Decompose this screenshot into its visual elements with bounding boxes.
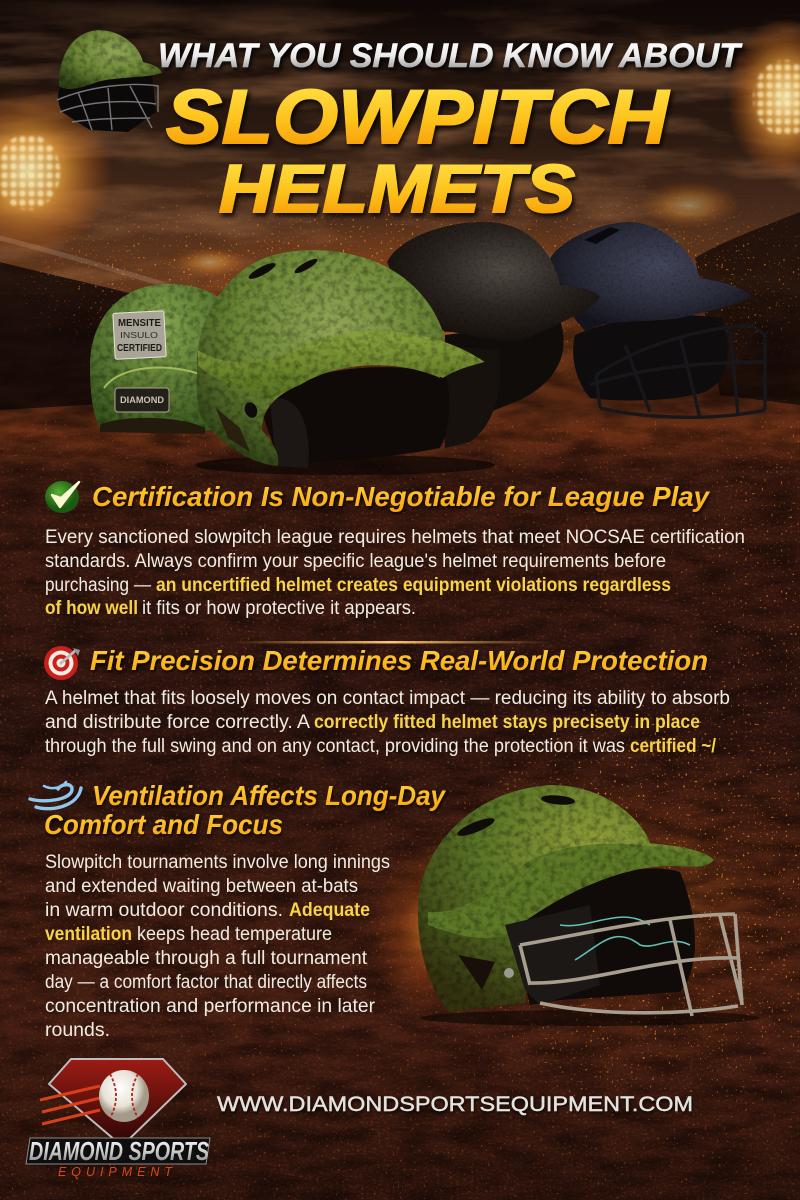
body text: standards. Always confirm your specific league's helmet requirements before bbox=[45, 551, 666, 572]
body text: concentration and performance in later bbox=[45, 996, 376, 1017]
subtitle: EQUIPMENT bbox=[58, 1165, 173, 1179]
body text: Every sanctioned slowpitch league requires helmets that meet NOCSAE certification bbox=[45, 527, 745, 548]
wordmark band bbox=[26, 1138, 210, 1164]
heading line 2: Comfort and Focus bbox=[44, 809, 283, 840]
website url: WWW.DIAMONDSPORTSEQUIPMENT.COM bbox=[217, 1093, 693, 1116]
body text: correctly fitted helmet stays precisety in place bbox=[314, 712, 700, 733]
body text bbox=[45, 852, 390, 1041]
logo: diamond sports equipment bbox=[26, 1059, 210, 1179]
body text: purchasing — bbox=[45, 575, 151, 596]
body text: through the full swing and on any contact, providing the protection it was bbox=[45, 736, 625, 757]
section: fit precision bbox=[44, 645, 730, 757]
body text: A helmet that fits loosely moves on contact impact — reducing its ability to absorb bbox=[45, 688, 730, 709]
body text: Adequate bbox=[289, 900, 370, 921]
body text: it fits or how protective it appears. bbox=[142, 598, 416, 619]
heading line 1: Ventilation Affects Long-Day bbox=[92, 780, 447, 811]
body text: and distribute force correctly. A bbox=[45, 712, 310, 733]
section: ventilation bbox=[30, 780, 447, 1041]
title line: slowpitch: SLOWPITCH bbox=[166, 75, 670, 160]
body text: of how well bbox=[45, 598, 138, 619]
body text: manageable through a full tournament bbox=[45, 948, 368, 969]
heading: Fit Precision Determines Real-World Protection bbox=[90, 645, 708, 676]
helmet: large green batting helmet bbox=[195, 250, 500, 475]
speed streaks bbox=[40, 1086, 100, 1124]
baseball bbox=[99, 1070, 149, 1122]
body text: rounds. bbox=[45, 1020, 110, 1041]
body text: ventilation bbox=[45, 924, 132, 945]
title bbox=[158, 37, 743, 227]
certified label: INSULO bbox=[120, 331, 158, 340]
wordmark: DIAMOND SPORTS bbox=[29, 1136, 209, 1166]
diamond emblem bbox=[49, 1059, 186, 1146]
body text bbox=[45, 688, 730, 757]
body text: keeps head temperature bbox=[137, 924, 332, 945]
body text: day — a comfort factor that directly affects bbox=[45, 972, 367, 993]
helmet: navy with cage bbox=[548, 222, 765, 418]
icon: small caged helmet bbox=[57, 30, 162, 132]
helmet: matte black bbox=[387, 222, 600, 420]
icon: target with dart bbox=[44, 646, 80, 680]
lower badge: DIAMOND bbox=[120, 395, 165, 405]
certified label: MENSITE bbox=[118, 318, 161, 329]
body text: an uncertified helmet creates equipment violations regardless bbox=[156, 575, 671, 596]
certified label bbox=[113, 311, 166, 359]
body text bbox=[45, 527, 745, 619]
helmet: green with face cage and airflow bbox=[368, 785, 760, 1026]
heading: Certification Is Non-Negotiable for League Play bbox=[92, 481, 711, 512]
body text: and extended waiting between at-bats bbox=[45, 876, 358, 897]
lower badge bbox=[115, 388, 169, 412]
body text: Slowpitch tournaments involve long innings bbox=[45, 852, 390, 873]
body text: certified ~/ bbox=[630, 736, 717, 757]
certified label: CERTIFIED bbox=[117, 343, 162, 354]
body text: in warm outdoor conditions. bbox=[45, 900, 283, 921]
title line: helmets: HELMETS bbox=[219, 151, 575, 227]
icon: blue wind swirl bbox=[30, 782, 81, 809]
glowing divider bbox=[230, 641, 550, 644]
section: certification bbox=[45, 481, 745, 619]
title line: what you should know about: WHAT YOU SHOULD KNOW ABOUT bbox=[158, 37, 743, 75]
icon: green check bbox=[45, 481, 79, 513]
helmet: green back view with certified label bbox=[90, 284, 222, 434]
